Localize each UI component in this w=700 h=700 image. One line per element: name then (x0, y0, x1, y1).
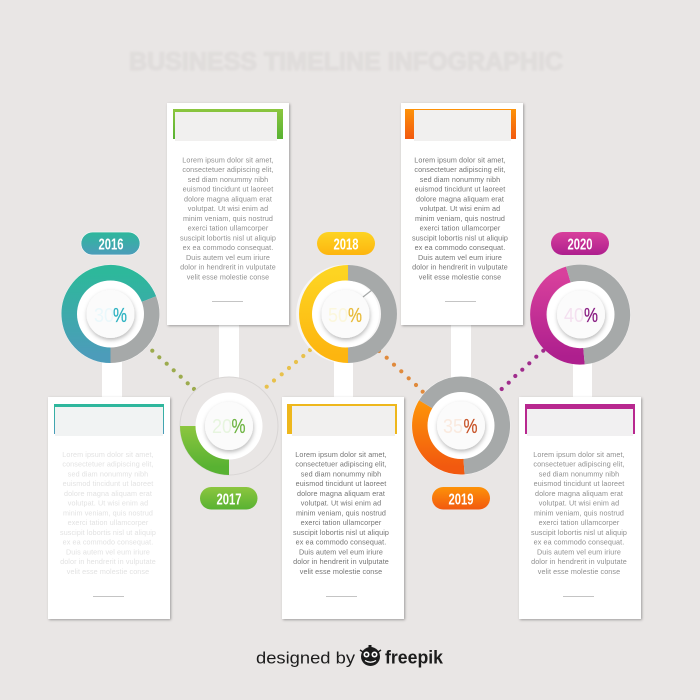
card text 2018: minim veniam, quis nostrud (296, 508, 386, 518)
value 2019 (443, 416, 478, 438)
year pill 2019: 2019 (448, 492, 474, 508)
card text 2019: dolore magna aliquam erat (416, 194, 504, 204)
card text 2019: Lorem ipsum dolor sit amet, (414, 156, 506, 164)
icon: freepik mascot (360, 645, 381, 666)
value 2016: 30 (94, 305, 114, 327)
footer attribution: freepik (385, 648, 444, 668)
year pill 2020: 2020 (568, 236, 593, 254)
card text 2018: Lorem ipsum dolor sit amet, (295, 450, 387, 459)
footer attribution (256, 645, 444, 668)
value 2017: 20 (212, 416, 232, 438)
card text 2017: Lorem ipsum dolor sit amet, (182, 156, 274, 164)
card text 2017: velit esse molestie conse (187, 272, 269, 282)
card text 2019: ex ea commodo consequat. (415, 243, 505, 252)
donut chart 2019 (412, 376, 510, 475)
year pill 2016: 2016 (98, 236, 124, 254)
card text 2016: dolore magna aliquam erat (64, 489, 152, 498)
card text 2019: minim veniam, quis nostrud (415, 214, 505, 223)
card text 2017: euismod tincidunt ut laoreet (183, 185, 273, 194)
year pill 2018: 2018 (334, 236, 359, 254)
card text 2020: minim veniam, quis nostrud (534, 508, 624, 518)
card text 2017: sed diam nonummy nibh (188, 175, 268, 184)
donut chart 2018 (296, 265, 395, 363)
card text 2017: Duis autem vel eum iriure (186, 253, 270, 262)
card text 2017: minim veniam, quis nostrud (183, 214, 273, 223)
card text 2020: sed diam nonummy nibh (539, 470, 619, 478)
card text 2019: volutpat. Ut wisi enim ad (420, 204, 500, 213)
card text 2016: suscipit lobortis nisl ut aliquip (60, 528, 156, 537)
title: BUSINESS TIMELINE INFOGRAPHIC (129, 48, 563, 76)
card text 2020: euismod tincidunt ut laoreet (534, 479, 624, 488)
dotted connector 2019 to 2020 (500, 349, 545, 391)
value 2018: 50 (328, 305, 348, 327)
card text 2020: ex ea commodo consequat. (534, 538, 624, 547)
card text 2020: suscipit lobortis nisl ut aliquip (531, 528, 627, 537)
value 2016 (94, 305, 127, 327)
card text 2018: exerci tation ullamcorper (301, 518, 382, 527)
panel: card 2019 (401, 103, 523, 325)
card text 2019: euismod tincidunt ut laoreet (415, 185, 505, 194)
card text 2017: consectetuer adipiscing elit, (182, 165, 274, 174)
value 2018: % (348, 305, 362, 327)
year pill 2017 (200, 487, 258, 510)
card text 2017: ex ea commodo consequat. (183, 243, 273, 252)
card header 2019 (405, 109, 516, 141)
card text 2019: sed diam nonummy nibh (420, 175, 500, 184)
value 2017 (212, 416, 246, 438)
card text 2018: ex ea commodo consequat. (296, 538, 386, 547)
card text 2018: sed diam nonummy nibh (301, 470, 381, 478)
donut chart 2020 (530, 264, 630, 364)
card text 2019: dolor in hendrerit in vulputate (412, 263, 508, 272)
card text 2016: velit esse molestie conse (67, 567, 149, 576)
value 2020 (564, 305, 598, 327)
connector stems (102, 322, 592, 400)
panel: card 2016 (48, 397, 170, 619)
card text 2016: sed diam nonummy nibh (68, 470, 148, 478)
card text 2020: Duis autem vel eum iriure (537, 548, 621, 556)
card text 2017: volutpat. Ut wisi enim ad (188, 204, 268, 213)
card text 2016: volutpat. Ut wisi enim ad (68, 499, 148, 508)
card text 2016: exerci tation ullamcorper (68, 518, 149, 527)
card text 2018: suscipit lobortis nisl ut aliquip (293, 528, 389, 537)
card text 2018: consectetuer adipiscing elit, (295, 460, 387, 469)
card text 2017: exerci tation ullamcorper (188, 224, 269, 233)
value 2016: % (113, 305, 127, 327)
card text 2018: dolore magna aliquam erat (297, 489, 385, 498)
card header 2018 (287, 404, 397, 436)
value 2020: % (584, 305, 598, 327)
card text 2018: dolor in hendrerit in vulputate (293, 557, 389, 566)
card text 2016: ex ea commodo consequat. (63, 538, 153, 547)
card text 2020: consectetuer adipiscing elit, (533, 460, 625, 469)
card header 2017 (173, 109, 283, 141)
card text 2017: suscipit lobortis nisl ut aliquip (180, 234, 276, 242)
card text 2019: suscipit lobortis nisl ut aliquip (412, 234, 508, 242)
card header 2020 (525, 404, 635, 436)
card header 2016 (54, 404, 164, 436)
footer attribution: designed by (256, 648, 356, 668)
card text 2016: consectetuer adipiscing elit, (62, 460, 154, 469)
card text 2019: Duis autem vel eum iriure (418, 253, 502, 262)
value 2018 (328, 305, 362, 327)
year pill 2019 (432, 487, 490, 510)
card text 2020: exerci tation ullamcorper (539, 518, 620, 527)
value 2019: 35 (443, 416, 463, 438)
card text 2018: Duis autem vel eum iriure (299, 548, 383, 556)
dotted connector 2016 to 2017 (150, 349, 196, 391)
card text 2020: volutpat. Ut wisi enim ad (539, 499, 619, 508)
card text 2020: dolor in hendrerit in vulputate (531, 557, 627, 566)
card text 2020: dolore magna aliquam erat (535, 489, 623, 498)
donut chart 2016 (61, 265, 160, 363)
card text 2016: euismod tincidunt ut laoreet (63, 479, 153, 488)
card text 2019: exerci tation ullamcorper (420, 224, 501, 233)
year pill 2020 (551, 232, 609, 255)
card text 2020: velit esse molestie conse (538, 567, 620, 576)
donut chart 2017 (180, 377, 278, 475)
card text 2018: velit esse molestie conse (300, 567, 382, 576)
dotted connector 2018 to 2019 (377, 349, 425, 394)
card text 2016: Lorem ipsum dolor sit amet, (62, 450, 154, 459)
card text 2019: consectetuer adipiscing elit, (414, 165, 506, 174)
year pill 2018 (317, 232, 375, 255)
card text 2016: dolor in hendrerit in vulputate (60, 557, 156, 566)
dotted connector 2017 to 2018 (265, 348, 312, 389)
card text 2018: euismod tincidunt ut laoreet (296, 479, 386, 488)
value 2017: % (232, 416, 246, 438)
year pill 2016 (81, 232, 140, 255)
card text 2016: Duis autem vel eum iriure (66, 548, 150, 556)
value 2019: % (464, 416, 478, 438)
card text 2018: volutpat. Ut wisi enim ad (301, 499, 381, 508)
panel: card 2018 (282, 397, 404, 619)
panel: card 2017 (167, 103, 289, 325)
value 2020: 40 (564, 305, 584, 327)
year pill 2017: 2017 (216, 492, 242, 508)
card text 2020: Lorem ipsum dolor sit amet, (533, 450, 625, 459)
card text 2017: dolore magna aliquam erat (184, 194, 272, 204)
card text 2016: minim veniam, quis nostrud (63, 508, 153, 518)
panel: card 2020 (519, 397, 641, 619)
card text 2017: dolor in hendrerit in vulputate (180, 263, 276, 272)
card text 2019: velit esse molestie conse (419, 272, 501, 282)
